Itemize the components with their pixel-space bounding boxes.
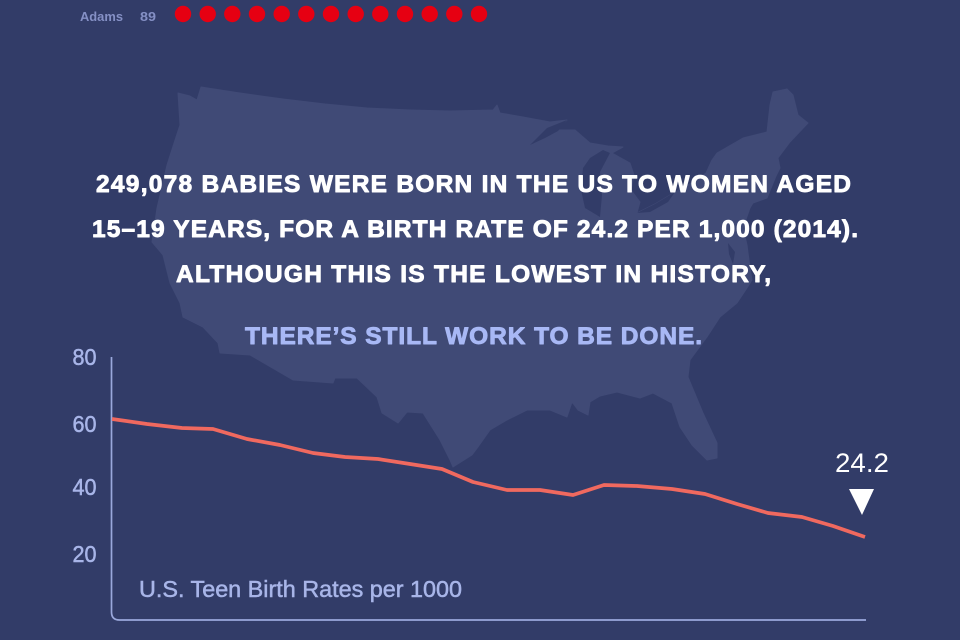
chart title: U.S. Teen Birth Rates per 1000 <box>139 576 462 602</box>
latest value label: 24.2 <box>835 448 889 478</box>
y-axis labels: 40 <box>72 474 96 500</box>
y-axis labels: 80 <box>72 344 96 370</box>
icon: down arrow marker <box>849 489 874 515</box>
y-axis labels: 20 <box>72 541 96 567</box>
y-axis labels <box>72 344 96 567</box>
bay: Chesapeake <box>728 243 735 264</box>
headline text block: ALTHOUGH THIS IS THE LOWEST IN HISTORY, <box>176 261 771 288</box>
data row: Adams county <box>80 6 487 24</box>
lake: Michigan <box>581 150 610 217</box>
map: United States silhouette <box>152 87 808 467</box>
row label: Adams <box>80 10 123 24</box>
headline text block: 249,078 BABIES WERE BORN IN THE US TO WOMEN AGED <box>96 171 851 198</box>
chart axes <box>112 357 866 620</box>
line chart: teen birth rates <box>72 344 889 620</box>
highlighted statement: THERE’S STILL WORK TO BE DONE. <box>245 323 702 350</box>
dot row <box>175 6 487 22</box>
row value: 89 <box>140 10 156 24</box>
lake: Erie <box>637 192 675 213</box>
y-axis labels: 60 <box>72 411 96 437</box>
data line <box>112 419 865 537</box>
headline text block: 15–19 YEARS, FOR A BIRTH RATE OF 24.2 PER 1,000 (2014). <box>92 216 858 243</box>
headline text block <box>92 171 858 288</box>
lake: Superior <box>530 120 567 145</box>
